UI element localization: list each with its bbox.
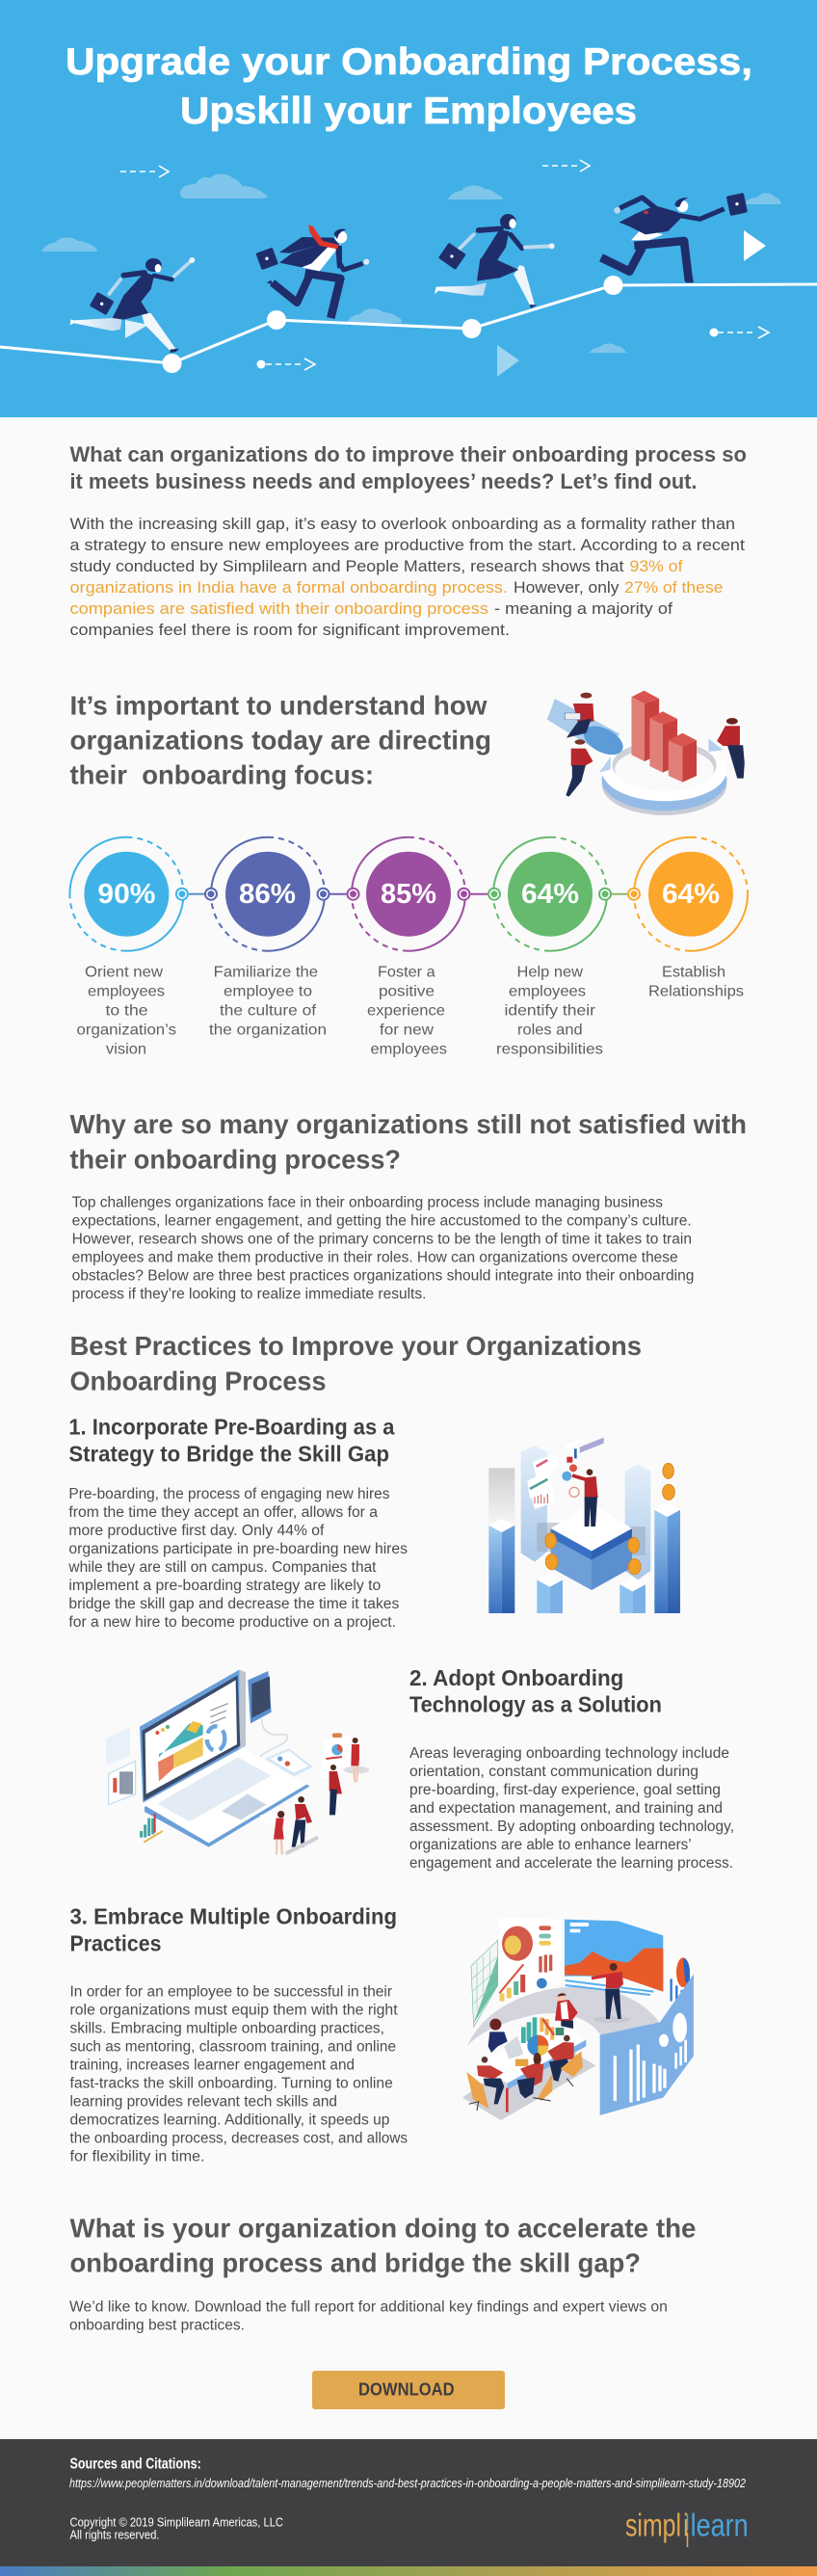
practice 2 heading: [409, 1665, 662, 1717]
dashed arrows: [120, 160, 769, 370]
heading: call to action: onboarding process and bridge the skill gap?: [69, 2248, 641, 2278]
practice 3 paragraph: In order for an employee to be successful in their: [69, 1984, 392, 2001]
label: orient new employees: [77, 964, 176, 1058]
intro paragraph: With the increasing skill gap, it’s easy to overlook onboarding as a formality rather than: [69, 516, 735, 533]
analyst: [572, 1469, 598, 1527]
practice 3 heading: Practices: [69, 1930, 162, 1955]
whiteboard: [320, 1733, 354, 1778]
intro paragraph: companies are satisfied with their onboarding process: [69, 600, 488, 618]
intro paragraph: companies feel there is room for significant improvement.: [69, 622, 510, 639]
logo: simplilearn: simpl: [625, 2508, 681, 2543]
download button: [312, 2371, 505, 2409]
text: challenges paragraph: employees and make them productive in their roles. How can organizations overcome these: [72, 1250, 678, 1266]
practice 1 heading: 1. Incorporate Pre-Boarding as a: [68, 1414, 395, 1439]
text: call to action paragraph: onboarding best practices.: [69, 2317, 245, 2333]
practice 1 paragraph: bridge the skill gap and decrease the time it takes: [68, 1596, 400, 1612]
practice 3 paragraph: such as mentoring, classroom training, and online: [69, 2039, 396, 2056]
heading: why not satisfied: [69, 1109, 747, 1174]
logo: simplilearn: [625, 2508, 749, 2547]
illustration: team meeting and curved dashboards: [462, 1918, 694, 2120]
text: challenges paragraph: process if they’re looking to realize immediate results.: [72, 1287, 426, 1303]
practice 1 paragraph: more productive first day. Only 44% of: [68, 1523, 325, 1539]
practice 1 paragraph: Pre-boarding, the process of engaging new hires: [68, 1486, 390, 1502]
illustration: team with red bar chart and ring: [547, 691, 745, 815]
intro paragraph: [69, 516, 745, 639]
label: foster: experience: [367, 1002, 445, 1020]
stat: 64% orange: [628, 837, 748, 951]
heading: onboarding focus: [69, 691, 491, 790]
copyright: All rights reserved.: [69, 2529, 160, 2542]
practice 2 paragraph: and expectation management, and training and: [409, 1800, 723, 1817]
runner 4: [601, 193, 748, 282]
practice 2 paragraph: organizations are able to enhance learners’: [409, 1837, 692, 1853]
mini bar chart: [142, 1814, 163, 1843]
logo: simplilearn: i: [683, 2508, 689, 2543]
label: establish relationships: Relationships: [648, 983, 744, 1000]
practice 1 paragraph: from the time they accept an offer, allows for a: [68, 1504, 378, 1521]
meeting people: [466, 1993, 583, 2112]
practice 2 paragraph: engagement and accelerate the learning process.: [409, 1855, 733, 1872]
panel: header banner: [0, 0, 817, 417]
practice 3 paragraph: training, increases learner engagement and: [69, 2058, 355, 2074]
panel: practice 1: [67, 1414, 680, 1631]
heading: call to action: [69, 2214, 696, 2278]
practice 1 paragraph: [67, 1486, 408, 1631]
intro paragraph: - meaning a majority of: [494, 600, 672, 618]
title: Upskill your Employees: [180, 91, 637, 132]
practice 2 heading: Technology as a Solution: [409, 1692, 662, 1717]
logo: simplilearn: learn: [691, 2508, 749, 2543]
label: help new employees: employees: [509, 983, 586, 1000]
text: challenges paragraph: [72, 1195, 694, 1303]
practice 1 paragraph: implement a pre-boarding strategy are likely to: [68, 1578, 381, 1594]
practice 3 paragraph: learning provides relevant tech skills and: [69, 2094, 337, 2111]
practice 3 paragraph: role organizations must equip them with the right: [69, 2003, 398, 2019]
practice 3 paragraph: skills. Embracing multiple onboarding practices,: [69, 2021, 384, 2037]
label: help new employees: Help new: [516, 964, 583, 981]
coins: [545, 1463, 674, 1575]
text: call to action paragraph: We’d like to know. Download the full report for additional key findings and expert views on: [69, 2298, 668, 2315]
label: foster: for new: [380, 1022, 434, 1039]
practice 1 paragraph: while they are still on campus. Companies that: [67, 1559, 377, 1576]
stat: 64% green: 64%: [521, 879, 579, 910]
practice 1 heading: Strategy to Bridge the Skill Gap: [68, 1442, 389, 1467]
sources: Sources and Citations:: [69, 2456, 201, 2473]
illustration: laptop with dashboards: [106, 1670, 369, 1855]
stat: 85%: [347, 837, 470, 951]
heading: why not satisfied: their onboarding process?: [69, 1144, 401, 1174]
practice 3 paragraph: for flexibility in time.: [69, 2149, 204, 2165]
practice 2 paragraph: [409, 1745, 734, 1872]
practice 3 paragraph: the onboarding process, decreases cost, and allows: [69, 2131, 408, 2147]
panel: practice 3: [69, 1904, 694, 2165]
text: challenges paragraph: Top challenges organizations face in their onboarding process include managing business: [72, 1195, 663, 1211]
label: help new employees: [496, 964, 603, 1058]
intro paragraph: 27% of these: [624, 579, 723, 597]
practice 3 paragraph: democratizes learning. Additionally, it speeds up: [69, 2112, 389, 2129]
label: orient new employees: to the: [106, 1002, 148, 1020]
panel: introduction: [69, 442, 747, 639]
label: familiarize: employee to: [224, 983, 312, 1000]
intro paragraph: a strategy to ensure new employees are productive from the start. According to a recent: [69, 537, 745, 554]
floating dashboards: [527, 1438, 604, 1509]
text: challenges paragraph: obstacles? Below are three best practices organizations should integrate into their onboarding: [72, 1268, 694, 1285]
stat: 64% orange: 64%: [662, 879, 720, 910]
gradient strip: [0, 2566, 817, 2576]
intro paragraph: 93% of: [630, 558, 683, 575]
label: help new employees: identify their: [505, 1002, 596, 1020]
label: familiarize: Familiarize the: [214, 964, 318, 981]
practice 2 paragraph: assessment. By adopting onboarding technology,: [409, 1819, 734, 1835]
label: orient new employees: Orient new: [85, 964, 163, 981]
person right: [717, 718, 745, 779]
text: challenges paragraph: However, research shows one of the primary concerns to be the length of time it takes to train: [72, 1232, 692, 1248]
intro paragraph: However, only: [514, 579, 619, 597]
practice 1 paragraph: organizations participate in pre-boarding new hires: [68, 1541, 408, 1557]
label: orient new employees: employees: [88, 983, 165, 1000]
heading: best practices: Best Practices to Improve your Organizations: [69, 1331, 642, 1361]
label: foster: Foster a: [378, 964, 435, 981]
heading: onboarding focus: It’s important to understand how: [69, 691, 488, 721]
heading: onboarding focus: their onboarding focus:: [69, 760, 374, 790]
connectors: [189, 893, 628, 895]
label: help new employees: responsibilities: [496, 1041, 603, 1058]
stat: 85%: 85%: [381, 879, 436, 910]
label: familiarize: the culture of: [220, 1002, 317, 1020]
heading: call to action: What is your organization doing to accelerate the: [69, 2214, 696, 2244]
label: familiarize: [209, 964, 327, 1039]
presenter: [592, 1963, 630, 2023]
practice 1 heading: [68, 1414, 395, 1467]
practice 2 paragraph: orientation, constant communication during: [409, 1764, 698, 1780]
intro heading: it meets business needs and employees’ needs? Let’s find out.: [69, 469, 698, 493]
runner 2: [255, 225, 369, 318]
runner 3: [435, 214, 555, 308]
download button: DOWNLOAD: [358, 2380, 455, 2400]
copyright: [69, 2516, 283, 2542]
practice 3 heading: 3. Embrace Multiple Onboarding: [69, 1904, 397, 1929]
practice 2 heading: 2. Adopt Onboarding: [409, 1665, 623, 1690]
practice 1 paragraph: for a new hire to become productive on a project.: [68, 1614, 396, 1631]
text: call to action paragraph: [69, 2298, 668, 2333]
intro heading: [69, 442, 747, 493]
intro paragraph: study conducted by Simplilearn and People Matters, research shows that: [69, 558, 624, 575]
heading: best practices: Onboarding Process: [69, 1366, 326, 1395]
label: familiarize: the organization: [209, 1022, 327, 1039]
person seated on roll: [565, 693, 594, 738]
practice 3 paragraph: fast-tracks the skill onboarding. Turning to online: [69, 2076, 393, 2092]
label: help new employees: roles and: [517, 1022, 583, 1039]
panel: footer: [0, 2439, 817, 2566]
people: [260, 1738, 369, 1855]
copyright: Copyright © 2019 Simplilearn Americas, LLC: [69, 2516, 283, 2530]
text: challenges paragraph: expectations, learner engagement, and getting the hire accustomed to the company’s culture.: [72, 1213, 692, 1230]
practice 2 paragraph: pre-boarding, first-day experience, goal setting: [409, 1782, 721, 1798]
label: orient new employees: organization’s: [77, 1022, 176, 1039]
intro paragraph: organizations in India have a formal onboarding process.: [69, 579, 508, 597]
practice 2 paragraph: Areas leveraging onboarding technology include: [409, 1745, 729, 1762]
stat: 90%: [69, 837, 188, 951]
stat: 86%: 86%: [239, 879, 296, 910]
label: foster: [367, 964, 447, 1058]
stat: 90%: 90%: [97, 879, 156, 910]
label: orient new employees: vision: [106, 1041, 146, 1058]
illustration: data towers and analyst: [488, 1438, 680, 1613]
stat: 64% green: [488, 837, 611, 951]
heading: onboarding focus: organizations today are directing: [69, 726, 491, 756]
heading: best practices: [69, 1331, 642, 1395]
panel: practice 2: [106, 1665, 734, 1872]
heading: why not satisfied: Why are so many organizations still not satisfied with: [69, 1109, 747, 1139]
label: establish relationships: Establish: [662, 964, 725, 981]
label: foster: positive: [379, 983, 435, 1000]
runner 1: [70, 257, 195, 353]
title: [66, 41, 752, 132]
title: Upgrade your Onboarding Process,: [66, 41, 752, 83]
label: foster: employees: [370, 1041, 447, 1058]
label: establish relationships: [648, 964, 744, 1000]
sources: [69, 2456, 747, 2490]
person lower left: [566, 739, 593, 797]
stat: 86%: [205, 837, 329, 951]
practice 3 paragraph: [69, 1984, 408, 2165]
intro heading: What can organizations do to improve their onboarding process so: [69, 442, 747, 466]
practice 3 heading: [69, 1904, 397, 1955]
chart: onboarding focus percentages: [69, 837, 748, 1058]
meeting table: [473, 2017, 586, 2089]
clouds: [41, 173, 781, 353]
growth line with milestones: [0, 276, 817, 373]
triangles: [125, 230, 766, 377]
